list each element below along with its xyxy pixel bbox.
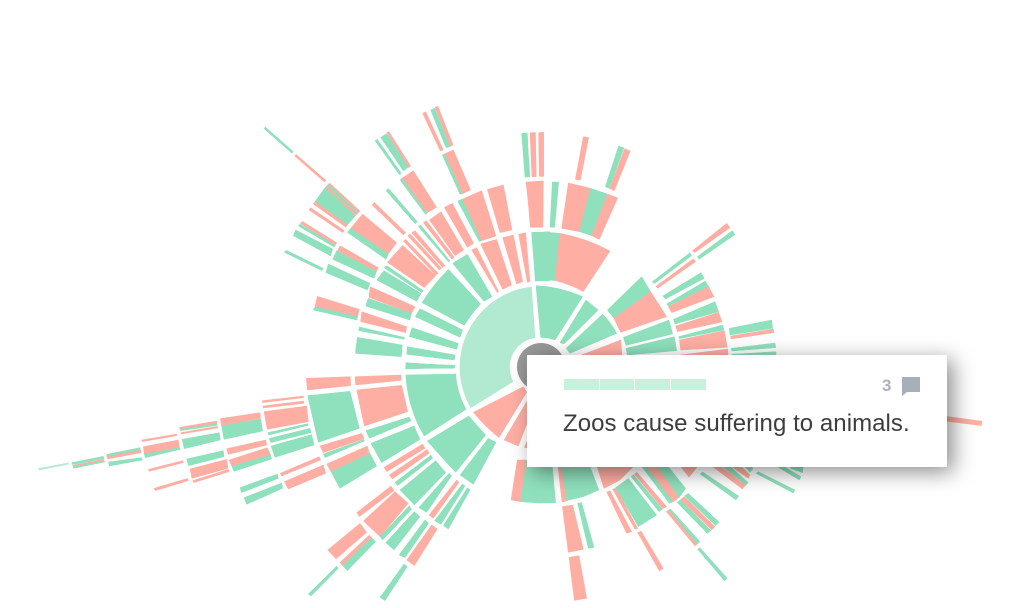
segments: far left tail: [38, 396, 314, 504]
segments: lower left: [280, 363, 528, 601]
tooltip card: [527, 355, 947, 467]
segments: upper left: [264, 106, 550, 368]
statement text: Zoos cause suffering to animals.: [563, 410, 910, 437]
inner ring: light green sector: [460, 287, 535, 408]
comment count: 3: [882, 376, 891, 395]
segments: bottom right: [511, 460, 803, 600]
support bar: [564, 379, 706, 390]
icon: comment bubble: [902, 377, 920, 396]
center circle: [517, 343, 565, 391]
segment: pink tail right of tooltip: [940, 416, 982, 425]
segments: upper right: [522, 132, 776, 363]
